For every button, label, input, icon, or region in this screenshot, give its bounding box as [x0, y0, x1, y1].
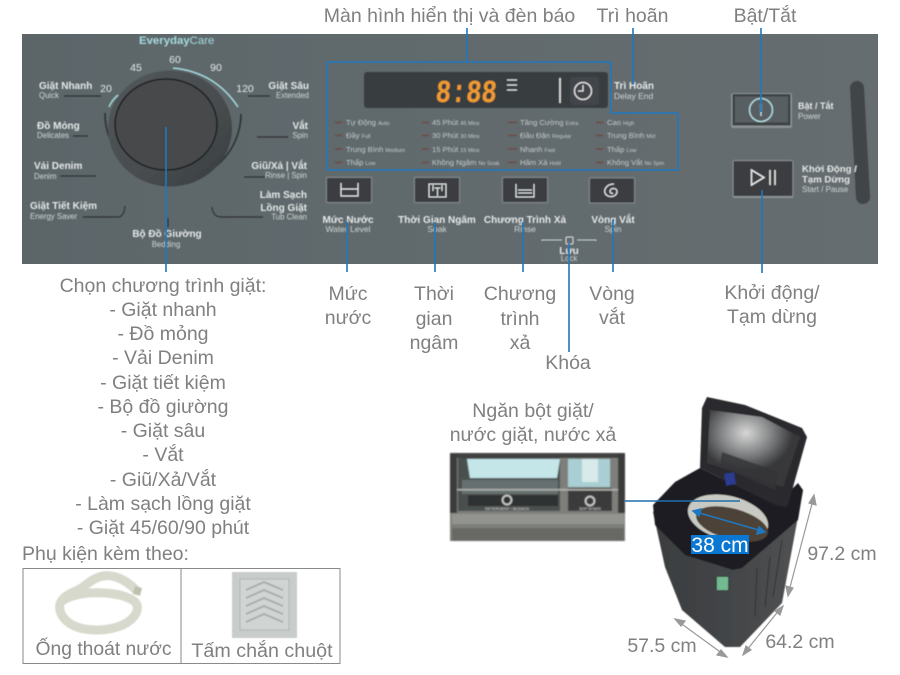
- indicator column: soak: [422, 118, 500, 167]
- button labels: Mức Nước: [322, 215, 374, 226]
- indicator column: spin: [596, 118, 664, 167]
- right program labels: Lồng Giặt: [260, 202, 308, 214]
- lock label: Lưu: [559, 246, 579, 257]
- text: wash program list: - Làm sạch lồng giặt: [75, 493, 251, 515]
- dial knob: [108, 70, 232, 186]
- display divider: [559, 78, 561, 103]
- label: drum diameter: 38 cm: [691, 534, 749, 557]
- icon: drain hose: [60, 576, 141, 630]
- label: rodent guard plate: Tấm chắn chuột: [191, 639, 333, 662]
- button labels: [322, 213, 635, 234]
- dial time numbers: 20: [100, 83, 112, 95]
- button labels: Rinse: [514, 224, 536, 234]
- indicator column: rinse: [508, 118, 579, 167]
- lock label: Lock: [561, 254, 577, 263]
- power label: [798, 100, 834, 121]
- callout lines: [166, 28, 762, 352]
- indicator column: rinse: Tăng Cường Extra: [520, 118, 579, 127]
- label: rinse program: xả: [510, 332, 530, 354]
- indicator column: spin: Trung Bình Mid: [607, 131, 655, 140]
- text: wash program list: - Bộ đồ giường: [98, 396, 228, 418]
- label: drain hose: Ống thoát nước: [36, 636, 172, 660]
- panel: option buttons: [322, 176, 636, 263]
- button labels: Vòng Vắt: [591, 213, 635, 226]
- soak button: [414, 176, 460, 204]
- text: wash program list: - Giặt tiết kiệm: [100, 372, 226, 394]
- start pause label: Khởi Động /: [802, 164, 857, 175]
- power button: [731, 93, 792, 128]
- indicator column: soak: Không Ngâm No Soak: [432, 158, 500, 167]
- power label: Bật / Tắt: [798, 100, 834, 111]
- bedding program label: Bedding: [152, 240, 180, 249]
- indicator column: water level: [335, 118, 405, 167]
- dial time numbers: 90: [210, 62, 222, 74]
- text: wash program list: Chọn chương trình giặt:: [60, 275, 266, 297]
- text: wash program list: - Giặt sâu: [121, 420, 205, 442]
- label: start pause: Tạm dừng: [727, 306, 817, 328]
- button labels: Chương Trình Xả: [484, 215, 566, 226]
- text: wash program list: [60, 275, 266, 539]
- dial time numbers: 45: [130, 62, 142, 74]
- left program labels: Đồ Mỏng: [37, 120, 80, 132]
- indicator column: water level: Trung Bình Medium: [346, 145, 405, 154]
- dial time numbers: 120: [236, 83, 254, 95]
- right program labels: Tub Clean: [271, 212, 307, 222]
- label: width: 57.5 cm: [627, 635, 697, 657]
- start pause label: Tạm Dừng: [802, 174, 850, 186]
- right program labels: Spin: [292, 131, 308, 140]
- right program labels: Extended: [276, 91, 309, 100]
- text: wash program list: - Vải Denim: [112, 347, 214, 369]
- delay end label: Delay End: [614, 91, 653, 101]
- label: rinse program: Chương: [484, 283, 556, 305]
- indicator column: soak: 45 Phút 45 Mins: [432, 118, 480, 127]
- left program labels: Giặt Nhanh: [39, 81, 92, 92]
- energy label sticker: [717, 577, 728, 590]
- arrow: width dimension: [675, 619, 727, 657]
- label: depth: 64.2 cm: [765, 631, 835, 653]
- image: detergent dispenser drawer: SOFTENER: [579, 506, 601, 511]
- text: wash program list: - Vắt: [142, 443, 184, 466]
- dial outer arc: [105, 113, 241, 182]
- panel: display and indicators: [335, 72, 664, 167]
- label: dispenser: Ngăn bột giặt/: [472, 400, 594, 422]
- indicator column: rinse: Đầu Đặn Regular: [520, 131, 572, 140]
- text: wash program list: - Giặt 45/60/90 phút: [77, 517, 250, 539]
- indicator column: rinse: Hãm Xả Hold: [520, 158, 561, 167]
- dial teal time arc: [109, 68, 238, 107]
- right program labels: Giặt Sâu: [268, 81, 309, 92]
- left program labels: Giặt Tiết Kiệm: [30, 200, 97, 212]
- machine top rim: [653, 468, 803, 570]
- label: height: 97.2 cm: [807, 543, 877, 565]
- delay end label: Trì Hoãn: [614, 81, 654, 92]
- indicator column: soak: 30 Phút 30 Mins: [432, 131, 480, 140]
- spin button: [588, 177, 636, 204]
- left program labels: Vải Denim: [34, 161, 82, 172]
- panel: power and start controls: [731, 88, 863, 198]
- label: water level: nước: [325, 307, 371, 329]
- machine drum: [683, 487, 773, 549]
- left program labels: Quick: [39, 91, 59, 100]
- panel: program dial section: [30, 35, 309, 249]
- bedding program label: Bộ Đồ Giường: [132, 228, 202, 240]
- brand label: EverydayCare: [139, 35, 214, 47]
- machine lid: [700, 397, 807, 507]
- label: spin: Vòng: [589, 283, 635, 305]
- heading: delay: Trì hoãn: [597, 5, 668, 27]
- left program labels: Denim: [34, 172, 57, 181]
- display screen: [364, 72, 608, 108]
- indicator column: spin: Cao High: [607, 118, 634, 127]
- panel: control panel background: [22, 34, 878, 264]
- right program labels: Rinse | Spin: [265, 171, 307, 180]
- indicator column: water level: Đầy Full: [346, 131, 370, 140]
- dial time numbers: [100, 54, 254, 95]
- right program labels: Giũ/Xả | Vắt: [251, 159, 308, 172]
- label: start pause: Khởi động/: [724, 282, 820, 304]
- left program labels: Delicates: [37, 131, 69, 140]
- text: wash program list: - Giũ/Xả/Vắt: [110, 468, 217, 491]
- heading: display and indicators: Màn hình hiển thị và đèn báo: [324, 5, 575, 27]
- start pause button: [732, 160, 794, 198]
- left program labels: Energy Saver: [30, 212, 78, 221]
- right program labels: Làm Sạch: [260, 190, 307, 201]
- indicator column: rinse: Nhanh Fast: [520, 145, 556, 154]
- display digits: 8:88: [434, 75, 498, 112]
- rinse button: [502, 176, 548, 204]
- icon: delay clock button: [570, 77, 599, 105]
- button labels: Thời Gian Ngâm: [398, 215, 476, 226]
- indicator column: water level: Tự Động Auto: [346, 118, 389, 127]
- button labels: Spin: [604, 224, 622, 234]
- arrow: depth dimension: [743, 606, 783, 655]
- side slot handle: [857, 88, 863, 197]
- arrow: height dimension: [786, 495, 816, 596]
- arrow: dispenser pointer: [625, 500, 740, 502]
- indicator column: water level: Thấp Low: [346, 158, 376, 167]
- indicator column: soak: 15 Phút 15 Mins: [432, 145, 480, 154]
- label: lock: Khóa: [545, 352, 591, 374]
- left program labels: [30, 81, 125, 221]
- image: washing machine: [653, 397, 807, 647]
- heading: accessories: Phụ kiện kèm theo:: [22, 543, 189, 565]
- label: soak time: gian: [416, 308, 452, 330]
- indicator column: spin: Không Vắt No Spin: [607, 158, 664, 167]
- start pause label: Start / Pause: [802, 185, 849, 194]
- text: wash program list: - Giặt nhanh: [109, 299, 217, 321]
- bedding program label: [132, 218, 202, 249]
- right program labels: Vắt: [292, 119, 309, 132]
- machine body: [653, 470, 803, 647]
- dial time numbers: 60: [169, 54, 181, 66]
- label: rinse program: trình: [500, 308, 540, 330]
- label: dispenser: nước giặt, nước xả: [450, 424, 616, 446]
- heading: power: Bật/Tắt: [734, 4, 797, 27]
- label: soak time: Thời: [414, 283, 454, 305]
- button labels: Soak: [427, 224, 447, 234]
- image: detergent dispenser drawer: [450, 453, 625, 541]
- arrow: drum diameter: [693, 509, 765, 534]
- power label: Power: [798, 112, 821, 121]
- label: water level: Mức: [328, 283, 368, 305]
- panel: accessories table: [23, 568, 340, 664]
- icon: wash symbol: [507, 80, 517, 90]
- label: spin: vắt: [599, 306, 626, 329]
- start pause label: [802, 164, 857, 194]
- text: wash program list: - Đồ mỏng: [117, 323, 209, 345]
- button labels: Water Level: [325, 224, 371, 234]
- lock label: [542, 237, 596, 263]
- icon: rodent guard plate: [232, 572, 297, 638]
- indicator column: spin: Thấp Low: [607, 145, 637, 154]
- delay end label: [614, 81, 654, 101]
- image: detergent dispenser drawer: DETERGENT / BLEACH: [485, 506, 529, 511]
- water level button: [326, 176, 372, 204]
- right program labels: [212, 81, 309, 222]
- label: soak time: ngâm: [410, 332, 458, 354]
